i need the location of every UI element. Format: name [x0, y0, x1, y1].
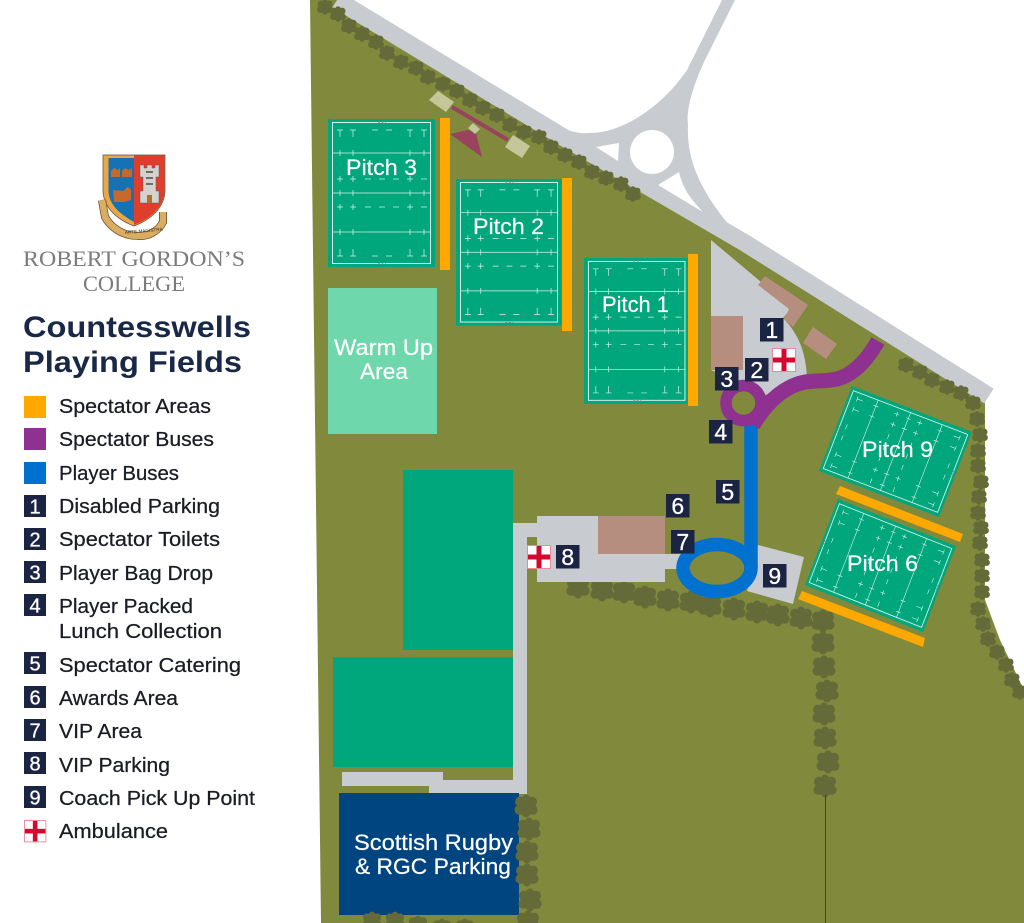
map marker 1 — [760, 317, 784, 343]
map ambulance icon by parking — [772, 348, 796, 372]
legend: spectator areas: Spectator Areas — [59, 396, 211, 418]
legend: awards area — [24, 686, 179, 710]
legend: player buses: Player Buses — [59, 463, 179, 485]
spectator area pitch 3 — [440, 118, 450, 270]
legend: player packed lunch collection: Lunch Collection — [59, 621, 222, 643]
Scottish Rugby and RGC parking: Scottish Rugby — [354, 830, 513, 855]
training structure with beige blocks — [429, 91, 530, 158]
pitch 2 — [456, 179, 562, 326]
legend: player packed lunch collection — [24, 594, 222, 643]
spectator area pitch 2 — [562, 178, 572, 331]
warm up area: Area — [360, 359, 409, 384]
map marker 4: 4 — [714, 419, 727, 445]
legend: spectator buses: Spectator Buses — [59, 429, 214, 451]
legend: spectator catering: Spectator Catering — [59, 655, 241, 677]
legend: disabled parking: Disabled Parking — [59, 496, 220, 518]
spectator bus route — [726, 341, 878, 425]
legend: VIP area — [24, 719, 143, 743]
pitch 6: Pitch 6 — [847, 551, 918, 576]
green field north — [403, 470, 513, 650]
legend: player packed lunch collection: 4 — [29, 596, 41, 618]
title: Playing Fields — [23, 346, 242, 379]
coach pick up hardstanding — [747, 545, 804, 604]
field background — [310, 0, 1024, 923]
green field south — [333, 657, 513, 767]
title — [23, 311, 251, 379]
legend: VIP parking: VIP Parking — [59, 755, 170, 777]
legend: coach pick up point: Coach Pick Up Point — [59, 788, 255, 810]
Scottish Rugby and RGC parking — [339, 793, 519, 915]
legend: player bag drop: 3 — [29, 562, 41, 584]
legend: VIP parking: 8 — [29, 754, 41, 776]
map marker 7: 7 — [676, 529, 689, 555]
pitch 9 — [819, 386, 972, 517]
legend: ambulance: Ambulance — [59, 821, 168, 843]
legend: disabled parking: 1 — [29, 496, 41, 518]
hedge south of VIP area — [566, 576, 840, 923]
legend: VIP area: VIP Area — [59, 721, 143, 743]
pitch 1: Pitch 1 — [602, 292, 669, 317]
map marker 1: 1 — [765, 317, 778, 343]
map marker 7 — [671, 529, 694, 555]
crest motto ribbon: ARTE MAGISTRA — [125, 227, 163, 235]
Scottish Rugby and RGC parking: & RGC Parking — [355, 854, 511, 879]
legend: spectator toilets: 2 — [29, 530, 41, 552]
panel: legend — [24, 396, 255, 843]
legend: awards area: 6 — [29, 688, 41, 710]
legend: spectator catering: 5 — [29, 654, 41, 676]
title: Countesswells — [23, 311, 251, 344]
legend: player bag drop: Player Bag Drop — [59, 563, 213, 585]
map marker 4 — [709, 419, 732, 445]
crest heraldic beasts — [111, 168, 132, 202]
map marker 9 — [763, 563, 786, 589]
map marker 5 — [716, 479, 740, 505]
warm up area — [328, 288, 437, 434]
pitch 1 — [584, 258, 689, 404]
tree line east boundary — [898, 357, 1024, 700]
map marker 2: 2 — [750, 357, 763, 383]
map marker 8 — [556, 544, 580, 570]
legend: VIP area: 7 — [29, 720, 41, 742]
legend: coach pick up point: 9 — [29, 788, 41, 810]
legend: VIP parking — [24, 752, 170, 777]
tree line along road — [317, 0, 641, 202]
parking area with buildings — [711, 240, 837, 395]
map marker 6 — [666, 493, 690, 519]
roads and roundabout — [337, 0, 989, 396]
map marker 3 — [715, 366, 738, 392]
icon: college crest — [102, 155, 165, 236]
college name: COLLEGE — [83, 271, 185, 296]
college name: ROBERT GORDON’S — [23, 246, 245, 271]
pitch 6 — [805, 499, 956, 632]
college name — [23, 246, 245, 296]
trees beside parking — [363, 795, 542, 923]
spectator area between pitches 9 and 6 — [836, 486, 963, 542]
VIP area road and hardstanding — [342, 516, 690, 794]
awards area building — [598, 516, 665, 554]
spectator area below pitch 6 — [798, 591, 925, 647]
legend: awards area: Awards Area — [59, 688, 179, 710]
legend: ambulance — [24, 820, 168, 843]
spectator area pitch 1 — [688, 254, 698, 406]
panel: site map — [310, 0, 1024, 923]
map marker 8: 8 — [561, 544, 574, 570]
pitch 2: Pitch 2 — [473, 214, 544, 239]
crest tower — [140, 165, 159, 203]
player bus route — [683, 423, 751, 592]
map ambulance icon by VIP parking — [528, 546, 550, 568]
legend: player packed lunch collection: Player Packed — [59, 596, 193, 618]
warm up area: Warm Up — [334, 335, 433, 360]
pitch 9: Pitch 9 — [862, 437, 933, 462]
map marker 5: 5 — [721, 479, 734, 505]
map marker 3: 3 — [720, 366, 733, 392]
map marker 9: 9 — [768, 563, 781, 589]
pitch 3 — [328, 119, 435, 267]
map marker 2 — [745, 357, 768, 383]
map marker 6: 6 — [671, 493, 684, 519]
pitch 3: Pitch 3 — [346, 155, 417, 180]
legend: spectator toilets: Spectator Toilets — [59, 529, 220, 551]
legend: spectator catering — [24, 652, 241, 677]
